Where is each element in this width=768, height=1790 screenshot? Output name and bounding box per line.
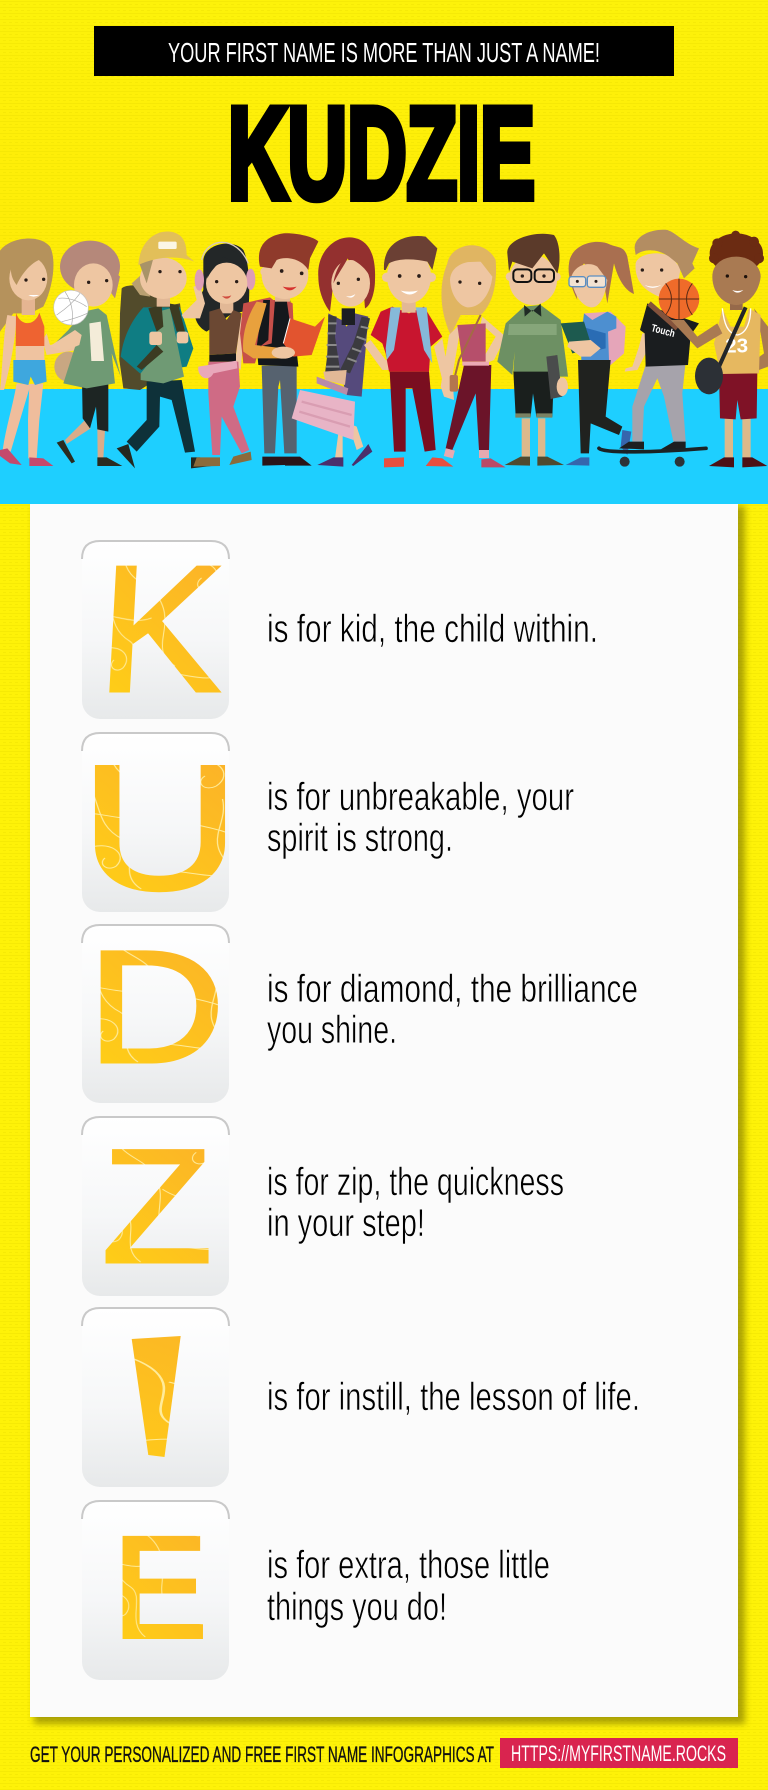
text: U lines: spirit is strong. <box>267 817 453 860</box>
tile: letter E <box>82 1501 229 1680</box>
person 11 on skateboard with basketball <box>599 230 706 467</box>
person 12 in basketball tank top: 23 <box>725 335 748 358</box>
name title: KUDZIE <box>228 80 535 226</box>
text: U lines <box>267 776 574 860</box>
text: D lines: is for diamond, the brilliance <box>267 968 638 1011</box>
tile: letter U: U <box>80 728 240 927</box>
person 4 with headphones <box>182 242 255 467</box>
person 9 with glasses <box>497 234 568 466</box>
icon: skateboard <box>599 448 706 467</box>
text: E lines: things you do! <box>267 1586 447 1629</box>
text: Z lines: is for zip, the quickness <box>267 1161 564 1204</box>
icon: basketball <box>659 279 699 319</box>
text: E lines <box>267 1544 550 1629</box>
text: D lines: you shine. <box>267 1009 397 1052</box>
blue ground band <box>0 389 768 504</box>
text: Z lines: in your step! <box>267 1202 425 1245</box>
group of people, left half <box>0 231 375 468</box>
group of people, right half <box>364 230 768 467</box>
person 7 with blue backpack straps <box>364 236 453 467</box>
text: E lines: is for extra, those little <box>267 1544 550 1587</box>
person 5 with book <box>240 233 325 466</box>
text: D lines <box>267 968 638 1052</box>
tile: letter I: I <box>92 1298 220 1495</box>
tile: letter E: E <box>113 1508 207 1668</box>
person 10 with tablet and ponytail <box>561 242 634 466</box>
footer call to action: GET YOUR PERSONALIZED AND FREE FIRST NAME INFOGRAPHICS AT <box>30 1742 494 1767</box>
icon: volleyball <box>54 290 88 325</box>
text: U lines: is for unbreakable, your <box>267 776 574 819</box>
person 3 with backpack and cap <box>117 231 220 468</box>
text: K line: is for kid, the child within. <box>267 608 598 651</box>
white content panel <box>30 504 738 1717</box>
text: Z lines <box>267 1161 564 1245</box>
person 2 with volleyball <box>50 241 122 466</box>
person 1 <box>0 238 78 466</box>
text: I line: is for instill, the lesson of life. <box>267 1376 640 1419</box>
tile: letter Z: Z <box>101 1115 213 1297</box>
person 11 on skateboard with basketball: Touch <box>650 322 676 340</box>
tile: letter K: K <box>93 528 229 729</box>
panel shadow <box>34 506 745 1724</box>
person 6 with pink bag <box>292 237 375 467</box>
tagline banner <box>94 26 674 76</box>
person 8 blonde girl <box>441 245 506 467</box>
tile: letter D: D <box>87 918 225 1096</box>
person 12 in basketball tank top <box>659 231 768 467</box>
